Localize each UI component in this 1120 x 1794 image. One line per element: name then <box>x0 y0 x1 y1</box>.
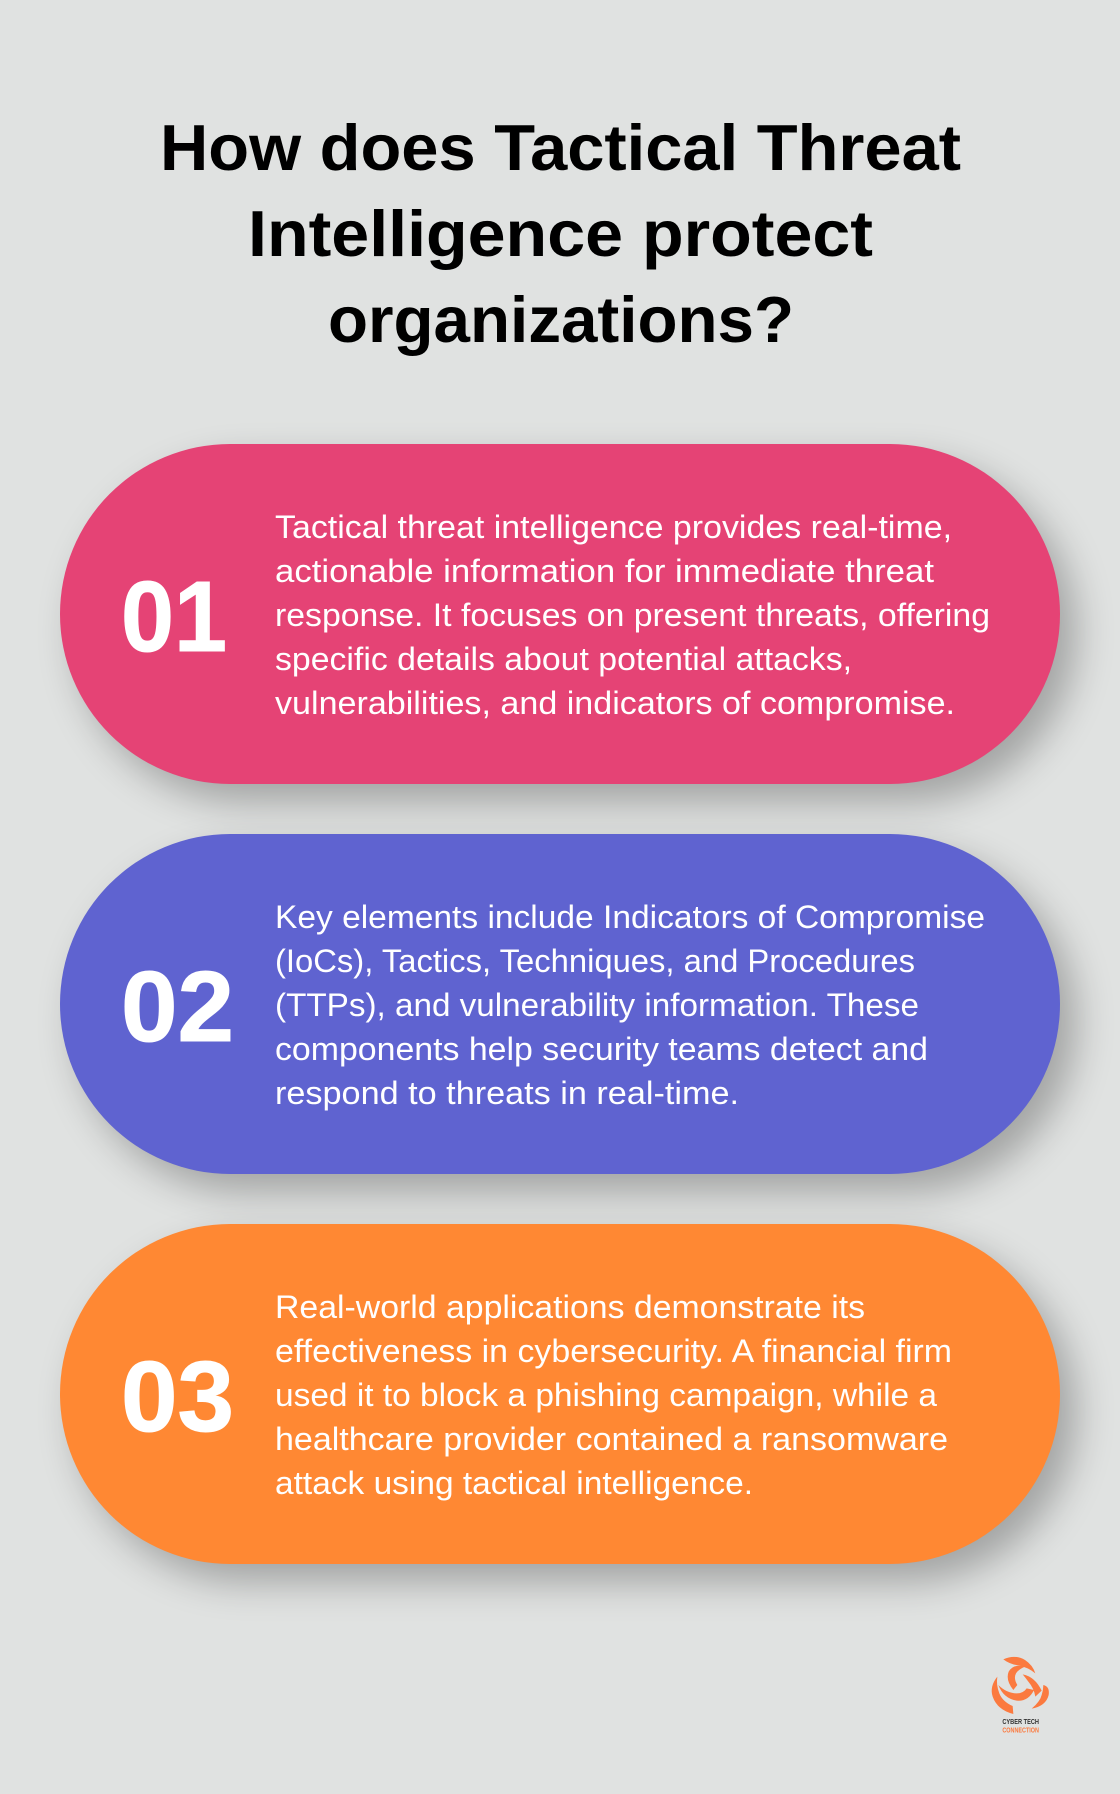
title: How does Tactical Threat <box>160 111 961 184</box>
text block: step 03: used it to block a phishing campaign, while a <box>275 1377 937 1413</box>
text block: step 02: components help security teams detect and <box>275 1031 928 1067</box>
title <box>160 111 961 356</box>
number 01: 01 <box>121 561 227 673</box>
text block: step 01: response. It focuses on present threats, offering <box>275 597 990 633</box>
text block: step 01: vulnerabilities, and indicators of compromise. <box>275 685 955 721</box>
text block: step 02: (IoCs), Tactics, Techniques, and Procedures <box>275 943 915 979</box>
icon: company logo: CONNECTION <box>1002 1725 1039 1734</box>
text block: step 03: healthcare provider contained a ransomware <box>275 1421 948 1457</box>
text block: step 03 <box>275 1289 952 1501</box>
text block: step 03: effectiveness in cybersecurity. A financial firm <box>275 1333 952 1369</box>
panel: step 03 <box>60 1224 1060 1564</box>
text block: step 03: Real-world applications demonstrate its <box>275 1289 865 1325</box>
panel: step 01 <box>60 444 1060 784</box>
panel: step 02 <box>60 834 1060 1174</box>
text block: step 02 <box>275 899 985 1111</box>
number 02: 02 <box>121 951 234 1063</box>
title: Intelligence protect <box>248 197 873 270</box>
text block: step 01: specific details about potential attacks, <box>275 641 852 677</box>
icon: company logo <box>992 1656 1049 1734</box>
title: organizations? <box>328 283 794 356</box>
icon: company logo: CYBER TECH <box>1002 1717 1039 1726</box>
text block: step 03: attack using tactical intelligence. <box>275 1465 753 1501</box>
text block: step 01 <box>275 509 990 721</box>
text block: step 02: Key elements include Indicators of Compromise <box>275 899 985 935</box>
text block: step 01: actionable information for immediate threat <box>275 553 934 589</box>
text block: step 02: (TTPs), and vulnerability information. These <box>275 987 919 1023</box>
text block: step 01: Tactical threat intelligence provides real-time, <box>275 509 952 545</box>
text block: step 02: respond to threats in real-time. <box>275 1075 739 1111</box>
number 03: 03 <box>121 1341 234 1453</box>
